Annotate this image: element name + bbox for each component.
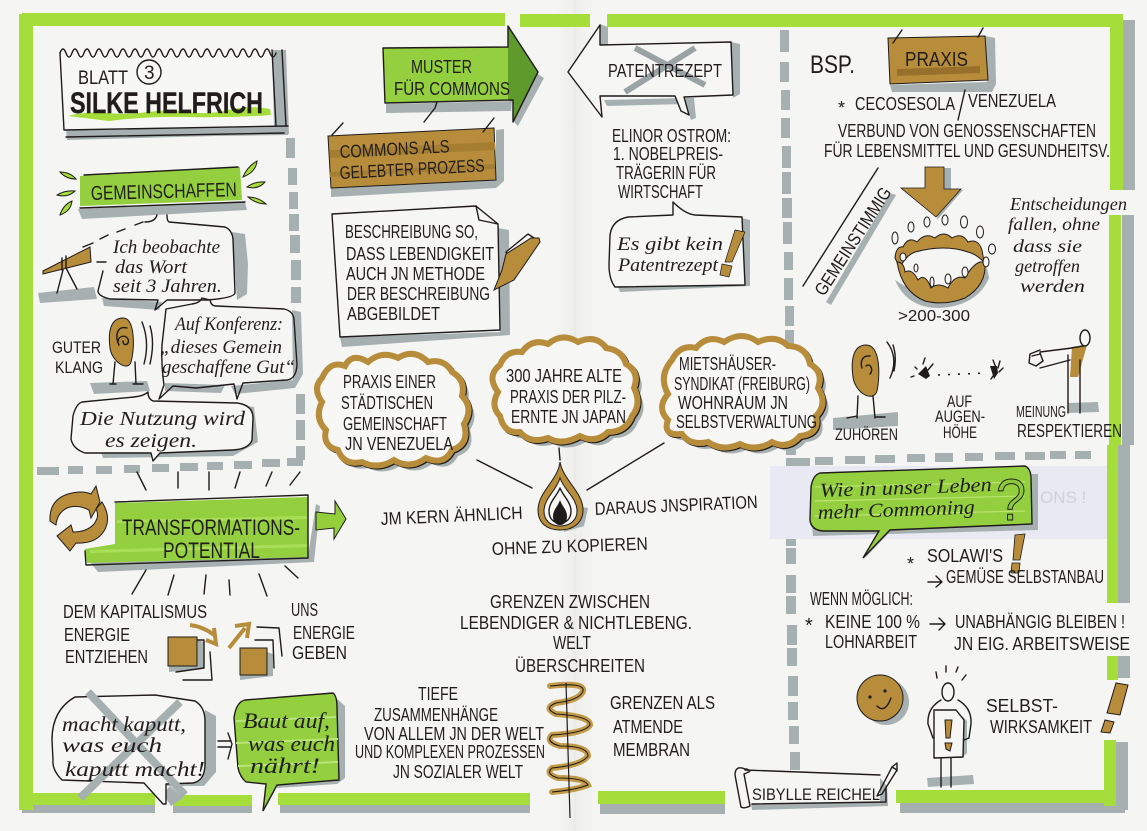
text: Selbstwirksamkeit: WIRKSAMKEIT: [990, 717, 1092, 737]
speech bubble: macht kaputt (crossed out): [52, 692, 216, 806]
cloud: Japan: [492, 337, 644, 448]
text: Entscheidungen: getroffen: [1015, 256, 1080, 276]
cloud: Venezuela: JN VENEZUELA: [345, 434, 453, 454]
text: wenn möglich: WENN MÖGLICH:: [810, 589, 913, 609]
speech bubble: observation: [98, 215, 248, 310]
text: uns Energie geben: ENERGIE: [293, 623, 355, 643]
text: Cecosesola: [824, 90, 1110, 161]
text: Tiefe Zusammenhänge: UND KOMPLEXEN PROZESSEN: [355, 742, 545, 762]
text: Cecosesola: *: [838, 98, 845, 118]
text: Im Kern ähnlich, daraus Inspiration: [380, 492, 758, 559]
text: Elinor Ostrom: WIRTSCHAFT: [618, 182, 703, 202]
icon: circle of people: [892, 215, 996, 325]
speech bubble: Baut auf: Baut auf,: [243, 708, 330, 733]
speech bubble: macht kaputt (crossed out): macht kaputt,: [62, 712, 186, 736]
text: wenn möglich: LOHNARBEIT: [825, 632, 917, 652]
icon: auf Augenhöhe: HÖHE: [943, 423, 977, 442]
icon: flame with connectors: [477, 443, 664, 532]
banner: Transformationspotential: [85, 472, 346, 596]
sign: Commons als gelebter Prozess: [328, 118, 504, 197]
icon: Zuhören ear: ZUHÖREN: [835, 425, 898, 444]
title notepad: [60, 49, 289, 140]
scroll: Sibylle Reichel: [735, 763, 897, 810]
icon: ear, Guter Klang: [52, 318, 152, 394]
text: uns Energie geben: GEBEN: [292, 643, 347, 663]
speech bubble: conference: Auf Konferenz:: [173, 314, 283, 335]
text: Im Kern ähnlich, daraus Inspiration: JM KERN ÄHNLICH: [380, 503, 523, 529]
icon: circle of people: >200-300: [898, 308, 970, 325]
arrow: Muster für Commons: [383, 26, 544, 126]
text: Grenzen überschreiten: GRENZEN ZWISCHEN: [490, 592, 650, 612]
speech bubble: Baut auf: was euch: [248, 731, 335, 756]
note: Beschreibung: ABGEBILDET: [347, 304, 440, 324]
speech bubble: observation: das Wort: [115, 257, 188, 278]
title notepad: 3: [144, 63, 155, 84]
text: Entscheidungen: dass sie: [1013, 236, 1082, 256]
note: Beschreibung: BESCHREIBUNG SO,: [345, 222, 478, 242]
cloud: Japan: PRAXIS DER PILZ-: [510, 387, 626, 407]
text: Grenzen überschreiten: LEBENDIGER & NICHTLEBENG.: [460, 613, 692, 633]
sign: Praxis: [888, 28, 996, 92]
text: Im Kern ähnlich, daraus Inspiration: DARAUS JNSPIRATION: [594, 492, 758, 519]
text: Selbstwirksamkeit: SELBST-: [986, 696, 1058, 716]
speech bubble: conference: geschaffene Gut“: [162, 357, 295, 378]
cloud: Mietshäuser Syndikat: SYNDIKAT (FREIBURG): [674, 374, 810, 394]
note: Beschreibung: AUCH JN METHODE: [346, 264, 485, 284]
icon: breathing membrane squiggle: [550, 683, 590, 818]
text: Grenzen als atmende Membran: GRENZEN ALS: [610, 693, 715, 713]
speech bubble: conference: „dieses Gemein: [160, 337, 282, 358]
sign: Commons als gelebter Prozess: COMMONS ALS: [339, 136, 450, 162]
icon: Zuhören ear: [833, 342, 898, 444]
note: Beschreibung: DASS LEBENDIGKEIT: [346, 244, 494, 264]
text: Elinor Ostrom: 1. NOBELPREIS-: [613, 144, 723, 164]
note: Beschreibung: DER BESCHREIBUNG: [347, 284, 490, 304]
cloud: Venezuela: STÄDTISCHEN: [341, 393, 433, 413]
text: dem Kapitalismus Energie entziehen: ENTZIEHEN: [65, 647, 148, 667]
speech bubble: Baut auf: [234, 693, 345, 811]
sign: Praxis: PRAXIS: [905, 49, 968, 71]
text: Im Kern ähnlich, daraus Inspiration: OHNE ZU KOPIEREN: [491, 534, 648, 559]
text: Solawis: *: [907, 554, 914, 574]
sign: Commons als gelebter Prozess: GELEBTER PROZESS: [339, 155, 485, 183]
text: Grenzen überschreiten: WELT: [553, 633, 591, 653]
icon: auf Augenhöhe: AUGEN-: [935, 407, 985, 426]
arrow: implication: [218, 733, 232, 759]
text: Tiefe Zusammenhänge: VON ALLEM JN DER WELT: [364, 724, 544, 744]
speech bubble: macht kaputt (crossed out): kaputt macht!: [65, 757, 205, 781]
speech bubble: mehr Commoning: ?: [996, 468, 1026, 533]
text: Grenzen als atmende Membran: MEMBRAN: [613, 740, 690, 760]
icon: auf Augenhöhe: [911, 358, 1003, 442]
text: Entscheidungen: fallen, ohne: [1008, 214, 1100, 234]
speech bubble: Nutzung: es zeigen.: [105, 430, 197, 452]
cloud: Venezuela: PRAXIS EINER: [343, 372, 436, 392]
speech bubble: conference: [159, 298, 303, 399]
title notepad: SILKE HELFRICH: [70, 87, 263, 120]
cloud: Mietshäuser Syndikat: [662, 336, 829, 454]
speech bubble: kein Patentrezept: Es gibt kein: [616, 234, 723, 255]
text: Elinor Ostrom: ELINOR OSTROM:: [612, 126, 731, 146]
cloud: Mietshäuser Syndikat: WOHNRAUM JN: [678, 393, 788, 413]
banner: Transformationspotential: TRANSFORMATIONS-: [122, 515, 300, 540]
scroll: Sibylle Reichel: SIBYLLE REICHEL: [752, 785, 880, 804]
text: Entscheidungen: [1008, 194, 1127, 296]
speech bubble: Baut auf: nährt!: [250, 753, 320, 778]
icon: auf Augenhöhe: AUF: [947, 392, 972, 411]
arrow: Patentrezept crossed out: [568, 24, 740, 120]
banner: Gemeinschaften: GEMEINSCHAFFEN: [91, 179, 237, 205]
cloud: Mietshäuser Syndikat: MIETSHÄUSER-: [679, 354, 776, 374]
arrow: Patentrezept crossed out: PATENTREZEPT: [608, 61, 722, 81]
icon: ear, Guter Klang: KLANG: [55, 358, 103, 377]
text: uns Energie geben: [291, 600, 355, 663]
text: Solawis: SOLAWI'S: [927, 546, 1003, 566]
cloud: Japan: 300 JAHRE ALTE: [506, 366, 622, 386]
cloud: Japan: ERNTE JN JAPAN: [511, 407, 626, 427]
text: wenn möglich: [805, 589, 1130, 654]
text: Grenzen als atmende Membran: ATMENDE: [613, 717, 683, 737]
text: Tiefe Zusammenhänge: JN SOZIALER WELT: [393, 762, 523, 782]
arrow: Muster für Commons: MUSTER: [411, 57, 472, 77]
text: Tiefe Zusammenhänge: TIEFE: [418, 684, 458, 704]
text: wenn möglich: *: [805, 615, 813, 637]
text: Selbstwirksamkeit: [986, 683, 1128, 737]
text: dem Kapitalismus Energie entziehen: DEM KAPITALISMUS: [63, 602, 207, 622]
text: Elinor Ostrom: [612, 126, 731, 202]
icon: ear, Guter Klang: GUTER: [52, 338, 101, 357]
text: Solawis: [907, 534, 1104, 587]
icon: energy squares and arrows: [168, 624, 282, 680]
text: dem Kapitalismus Energie entziehen: ENERGIE: [64, 625, 130, 645]
text: BSP: BSP.: [810, 51, 855, 79]
icon: figure with sign: [927, 666, 974, 787]
icon: respect figure: MEINUNG: [1016, 404, 1066, 421]
text: Gemeinstimmig with rule: GEMEINSTIMMIG: [811, 183, 895, 299]
icon: telescope: [38, 222, 143, 303]
banner: Transformationspotential: POTENTIAL: [163, 538, 260, 563]
arrow: down to circle: [901, 167, 963, 220]
text: Tiefe Zusammenhänge: ZUSAMMENHÄNGE: [374, 705, 498, 725]
speech bubble: kein Patentrezept: [609, 202, 750, 292]
text: Elinor Ostrom: TRÄGERIN FÜR: [616, 163, 716, 183]
title notepad: BLATT: [78, 68, 128, 89]
pasted correction strip: ONS !: [1040, 488, 1086, 507]
note: Beschreibung: [332, 206, 510, 347]
speech bubble: mehr Commoning: [810, 466, 1038, 560]
icon: pen: [494, 234, 540, 290]
speech bubble: kein Patentrezept: Patentrezept: [617, 255, 719, 276]
text: Grenzen als atmende Membran: [610, 693, 715, 760]
cloud: Venezuela: GEMEINSCHAFT: [343, 414, 447, 434]
text: Entscheidungen: werden: [1020, 276, 1085, 296]
text: Cecosesola: CECOSESOLA: [855, 94, 955, 114]
speech bubble: Nutzung: [71, 392, 258, 461]
text: uns Energie geben: UNS: [291, 600, 318, 620]
text: dem Kapitalismus Energie entziehen: [63, 602, 207, 667]
text: Cecosesola: VENEZUELA: [968, 91, 1056, 111]
pasted correction strip: [770, 466, 1107, 539]
speech bubble: observation: seit 3 Jahren.: [113, 276, 222, 297]
icon: circular arrows: [50, 486, 108, 551]
icon: smiley: [857, 675, 909, 725]
text: Grenzen überschreiten: ÜBERSCHREITEN: [515, 656, 645, 676]
speech bubble: mehr Commoning: Wie in unser Leben: [819, 474, 992, 502]
banner: Gemeinschaften: [57, 161, 266, 219]
cloud: Mietshäuser Syndikat: SELBSTVERWALTUNG: [676, 412, 817, 432]
text: wenn möglich: KEINE 100 %: [825, 612, 920, 632]
text: Tiefe Zusammenhänge: [355, 684, 545, 782]
text: Grenzen überschreiten: [460, 592, 692, 676]
arrow: Muster für Commons: FÜR COMMONS: [394, 79, 510, 99]
icon: respect figure: [1016, 330, 1122, 441]
speech bubble: mehr Commoning: mehr Commoning: [817, 497, 975, 524]
speech bubble: observation: Ich beobachte: [112, 237, 220, 258]
speech bubble: macht kaputt (crossed out): was euch: [62, 733, 162, 757]
text: Entscheidungen: Entscheidungen: [1009, 194, 1127, 214]
cloud: Venezuela: [317, 354, 475, 472]
speech bubble: Nutzung: Die Nutzung wird: [79, 408, 246, 430]
